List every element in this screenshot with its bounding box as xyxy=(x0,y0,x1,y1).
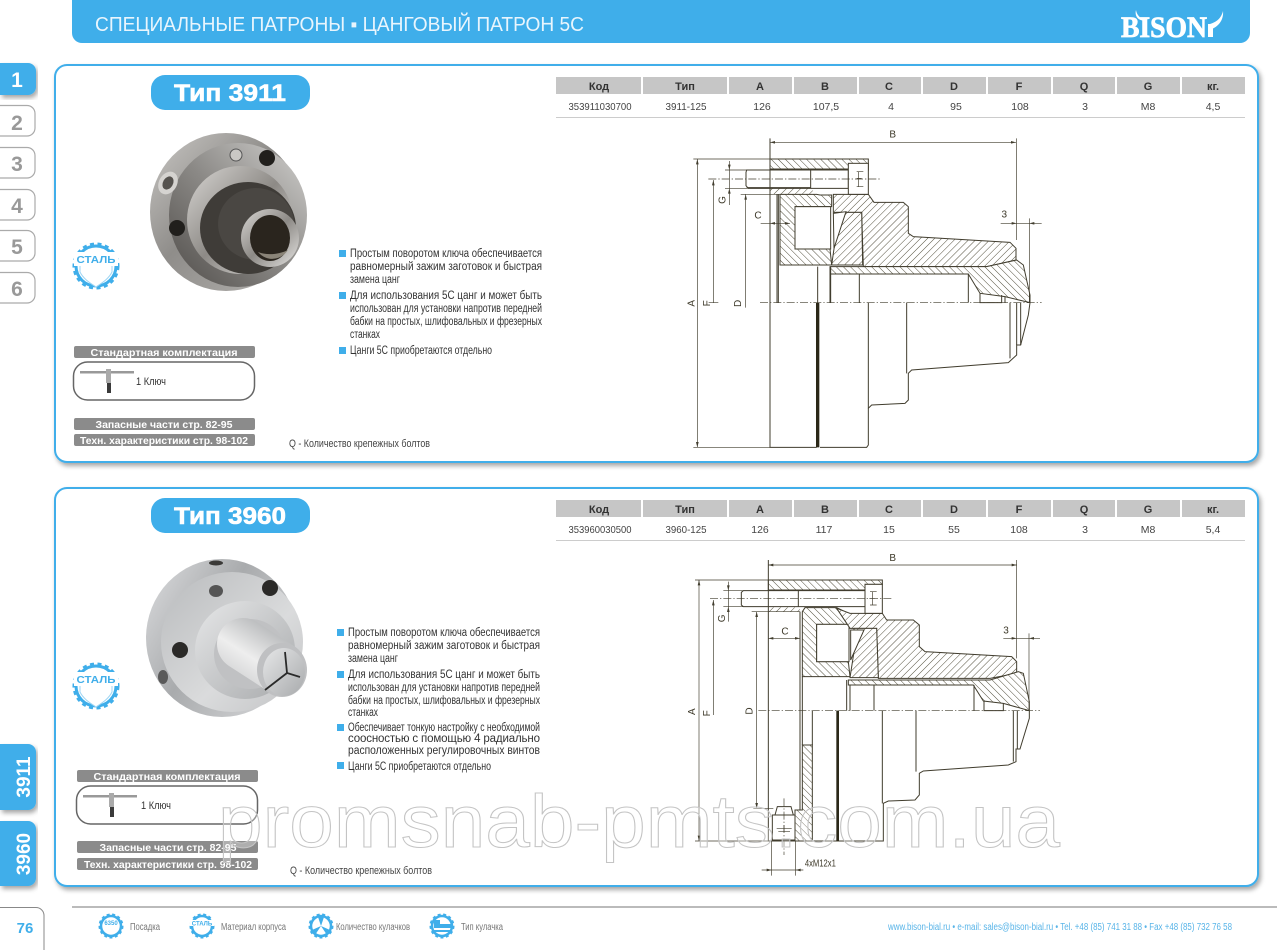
spec table 3960: 126 xyxy=(751,524,769,536)
heading: Тип 3911 xyxy=(151,75,310,110)
tab: section 2: 2 xyxy=(11,112,23,135)
tab: 3960 xyxy=(0,821,36,886)
icon: steel badge xyxy=(74,664,118,708)
tab: section 5 xyxy=(0,230,35,261)
spec table 3960: F xyxy=(1016,504,1023,516)
feature list 3960 xyxy=(337,627,540,773)
legend: Материал корпуса xyxy=(190,914,286,938)
feature list 3960: соосностью с помощью 4 радиально xyxy=(348,733,540,745)
feature list 3960: Простым поворотом ключа обеспечивается xyxy=(348,627,540,639)
technical drawing 3911: A xyxy=(686,300,697,307)
spec table 3911 xyxy=(556,77,1245,118)
spec table 3960: C xyxy=(885,504,893,516)
tab: 3911: 3911 xyxy=(14,756,35,798)
feature list 3911: Для использования 5С цанг и может быть xyxy=(350,290,542,302)
spec table 3960: 117 xyxy=(816,524,833,536)
spec table 3911: G xyxy=(1144,81,1152,93)
legend: Количество кулачков: Количество кулачков xyxy=(336,922,410,933)
spec table 3960: 353960030500 xyxy=(568,524,632,536)
spec table 3960 xyxy=(556,500,1245,541)
standard kit 3960: Стандартная комплектация xyxy=(94,772,241,783)
feature list 3911: замена цанг xyxy=(350,274,400,286)
technical drawing 3960: 4xM12x1 xyxy=(805,858,836,869)
technical drawing 3911: B xyxy=(889,130,896,141)
feature list 3911: станках xyxy=(350,329,380,341)
technical drawing 3960: 3 xyxy=(1003,626,1009,637)
technical drawing 3911: 3 xyxy=(1002,210,1008,221)
legend: Материал корпуса: СТАЛЬ xyxy=(192,922,213,928)
spec table 3911: F xyxy=(1016,81,1023,93)
header title: СПЕЦИАЛЬНЫЕ ПАТРОНЫ ▪ ЦАНГОВЫЙ ПАТРОН 5С xyxy=(95,12,584,36)
spec table 3960: 3 xyxy=(1082,524,1088,536)
technical drawing 3960: G xyxy=(717,614,728,622)
technical drawing 3911: F xyxy=(702,300,713,306)
feature list 3960: Цанги 5С приобретаются отдельно xyxy=(348,761,491,773)
technical drawing 3960: A xyxy=(687,708,698,715)
feature list 3911 xyxy=(339,248,542,357)
page number xyxy=(0,908,44,950)
icon: steel badge: СТАЛЬ xyxy=(76,254,116,266)
feature list 3911: бабки на простых, шлифовальных и фрезерных xyxy=(350,316,542,328)
spare parts labels 3960 xyxy=(77,841,258,871)
spare parts labels 3960: Запасные части стр. 82-95 xyxy=(100,843,237,854)
spec table 3911: M8 xyxy=(1141,101,1155,113)
technical drawing 3911 xyxy=(686,130,1042,447)
tab: section 3: 3 xyxy=(11,153,23,176)
spec table 3960: Q xyxy=(1080,504,1089,516)
spec table 3911: 353911030700 xyxy=(568,101,632,113)
spec table 3911: 3 xyxy=(1082,101,1088,113)
spec table 3911: 108 xyxy=(1011,101,1029,113)
standard kit 3911: Стандартная комплектация xyxy=(90,348,238,359)
photo: chuck 3960 xyxy=(146,559,307,717)
spare parts labels 3960: Техн. характеристики стр. 98-102 xyxy=(84,860,252,871)
spec table 3911: 4 xyxy=(888,101,894,113)
technical drawing 3960: B xyxy=(889,553,896,564)
spare parts labels 3911 xyxy=(74,418,255,447)
feature list 3960: Для использования 5С цанг и может быть xyxy=(348,669,540,681)
heading: Тип 3960: Тип 3960 xyxy=(174,503,286,530)
legend: Тип кулачка xyxy=(430,914,503,938)
spec table 3911: Q xyxy=(1080,81,1089,93)
technical drawing 3911: D xyxy=(733,300,744,307)
spec table 3960: кг. xyxy=(1207,504,1219,516)
heading: Тип 3960 xyxy=(151,498,310,533)
spec table 3960: Код xyxy=(589,504,609,516)
technical drawing 3960 xyxy=(687,553,1040,876)
icon: steel badge xyxy=(74,244,118,288)
spec table 3960: 55 xyxy=(948,524,960,536)
feature list 3960: расположенных регулировочных винтов xyxy=(348,745,540,757)
feature list 3911: использован для установки напротив передней xyxy=(350,303,542,315)
feature list 3960: бабки на простых, шлифовальных и фрезерных xyxy=(348,695,540,707)
technical drawing 3960: D xyxy=(744,707,755,715)
spec table 3911: 95 xyxy=(950,101,962,113)
technical drawing 3911: C xyxy=(754,210,762,221)
technical drawing 3960: C xyxy=(781,626,789,637)
spec table 3911: 3911-125 xyxy=(666,101,707,113)
standard kit 3960 xyxy=(76,770,258,824)
feature list 3911: равномерный зажим заготовок и быстрая xyxy=(350,261,542,273)
photo: chuck 3911 xyxy=(150,133,307,291)
spec table 3960: M8 xyxy=(1141,524,1155,536)
tab: 3960: 3960 xyxy=(14,833,35,875)
heading: Тип 3911: Тип 3911 xyxy=(174,80,286,107)
icon: T-key xyxy=(80,369,134,393)
tab: section 6: 6 xyxy=(11,278,23,301)
legend: Посадка xyxy=(100,914,160,938)
spare parts labels 3911: Запасные части стр. 82-95 xyxy=(96,420,233,431)
spec table 3911: 107,5 xyxy=(813,101,839,113)
spec table 3911: A xyxy=(756,81,764,93)
icon: steel badge: СТАЛЬ xyxy=(76,674,116,686)
tab: section 1 active xyxy=(0,63,36,95)
spec table 3960: G xyxy=(1144,504,1152,516)
spec table 3911: Код xyxy=(589,81,609,93)
tab: section 4: 4 xyxy=(11,195,23,218)
spec table 3911: кг. xyxy=(1207,81,1219,93)
spec table 3960: Тип xyxy=(675,504,695,516)
spec table 3911: B xyxy=(821,81,829,93)
legend: Тип кулачка: Тип кулачка xyxy=(461,922,503,933)
panel: type 3911 xyxy=(55,65,1258,462)
standard kit 3911 xyxy=(74,346,255,400)
feature list 3911: Цанги 5С приобретаются отдельно xyxy=(350,345,492,357)
legend: Материал корпуса: Материал корпуса xyxy=(221,922,286,933)
panel: type 3960 xyxy=(55,488,1258,886)
spec table 3960: 15 xyxy=(883,524,895,536)
feature list 3960: замена цанг xyxy=(348,653,398,665)
feature list 3911: Простым поворотом ключа обеспечивается xyxy=(350,248,542,260)
tab: section 4 xyxy=(0,190,35,220)
watermark: promsnab-pmts.com.ua xyxy=(218,780,1061,863)
spec table 3911: Тип xyxy=(675,81,695,93)
standard kit 3960: 1 Ключ xyxy=(141,800,171,812)
legend: Количество кулачков xyxy=(310,914,410,938)
standard kit 3911: 1 Ключ xyxy=(136,376,166,388)
legend: Посадка: Посадка xyxy=(130,922,160,933)
icon: T-key xyxy=(83,793,137,817)
page number: 76 xyxy=(17,920,33,937)
logo: BISON: BISON xyxy=(1121,11,1207,44)
spec table 3911: 126 xyxy=(753,101,771,113)
legend: Посадка: 6350 xyxy=(104,921,118,927)
feature list 3960: равномерный зажим заготовок и быстрая xyxy=(348,640,540,652)
tab: section 3 xyxy=(0,148,35,178)
note: Q 3911: Q - Количество крепежных болтов xyxy=(289,438,430,450)
spec table 3911: C xyxy=(885,81,893,93)
spec table 3911: 4,5 xyxy=(1206,101,1220,113)
spec table 3960: A xyxy=(756,504,764,516)
technical drawing 3911: G xyxy=(718,196,729,204)
spec table 3960: 3960-125 xyxy=(666,524,707,536)
feature list 3960: использован для установки напротив передней xyxy=(348,682,540,694)
tab: section 1 active: 1 xyxy=(11,69,23,92)
spare parts labels 3911: Техн. характеристики стр. 98-102 xyxy=(80,436,248,447)
tab: section 5: 5 xyxy=(11,236,23,259)
spec table 3960: 108 xyxy=(1010,524,1028,536)
note: Q 3960: Q - Количество крепежных болтов xyxy=(290,865,432,877)
tab: 3911 xyxy=(0,744,36,810)
tab: section 6 xyxy=(0,272,35,303)
feature list 3960: Обеспечивает тонкую настройку с необходимой xyxy=(348,722,540,734)
spec table 3960: B xyxy=(821,504,829,516)
technical drawing 3960: F xyxy=(702,710,713,716)
spec table 3960: 5,4 xyxy=(1206,524,1220,536)
feature list 3960: станках xyxy=(348,707,378,719)
spec table 3911: D xyxy=(950,81,958,93)
spec table 3960: D xyxy=(950,504,958,516)
tab: section 2 xyxy=(0,106,35,136)
footer rule xyxy=(72,906,1277,908)
header bar xyxy=(72,0,1250,43)
